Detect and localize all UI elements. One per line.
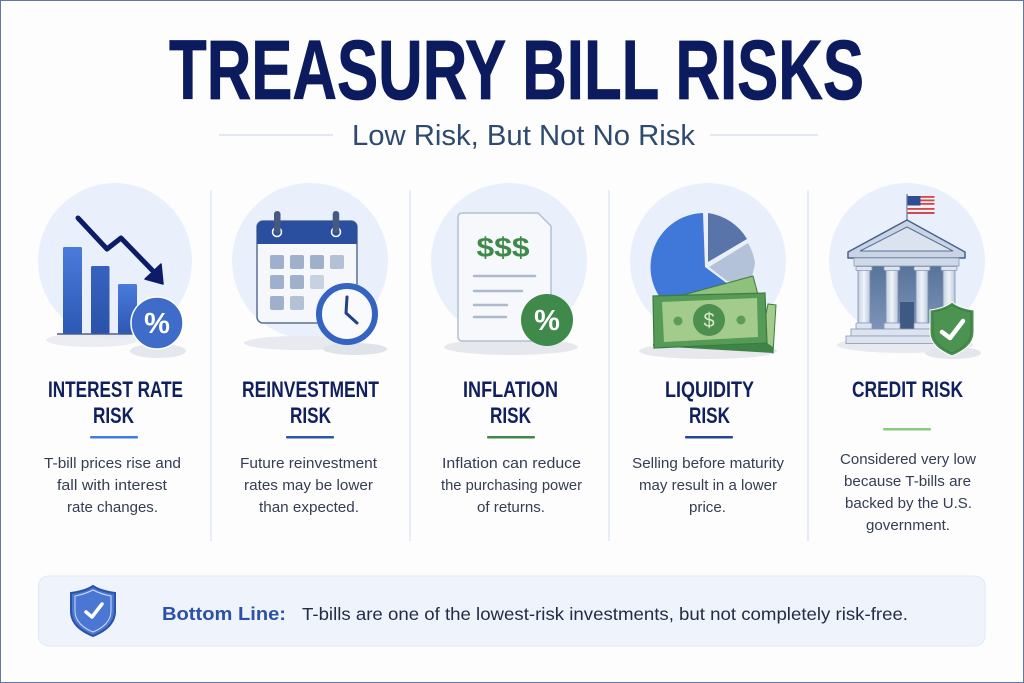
icon: document with dollars and percent badge: % — [534, 305, 560, 337]
panel: reinvestment risk — [232, 183, 388, 516]
icon: calendar with clock — [232, 183, 388, 355]
description — [840, 452, 977, 534]
heading — [665, 377, 754, 428]
heading: RISK — [93, 403, 134, 428]
icon: falling bar chart with percent badge — [38, 183, 192, 358]
icon: document with dollars and percent badge: $$$ — [476, 232, 530, 263]
heading: RISK — [290, 403, 331, 428]
description: Selling before maturity — [632, 456, 785, 472]
icon: pie chart with banknotes — [630, 183, 786, 359]
icon: falling bar chart with percent badge: % — [144, 308, 170, 340]
accent underline — [286, 436, 334, 438]
panel: liquidity risk — [630, 183, 786, 516]
icon: document with dollars and percent badge — [431, 183, 587, 355]
panel: interest rate risk — [38, 183, 192, 516]
accent underline — [487, 436, 535, 438]
heading — [48, 377, 183, 428]
description: may result in a lower — [639, 478, 777, 494]
description — [632, 456, 785, 516]
icon: government building with flag and shield — [829, 183, 985, 359]
heading: REINVESTMENT — [242, 377, 379, 402]
description: rate changes. — [67, 500, 158, 516]
icon: shield with check — [71, 586, 115, 636]
description: Future reinvestment — [240, 456, 377, 472]
description: fall with interest — [57, 478, 167, 494]
heading: INFLATION — [463, 377, 558, 402]
description: rates may be lower — [244, 478, 373, 494]
panel: credit risk — [829, 183, 985, 534]
description: Inflation can reduce — [442, 456, 581, 472]
label: bottom line: Bottom Line: — [162, 604, 286, 624]
panel: bottom line callout — [38, 576, 985, 646]
heading: RISK — [490, 403, 531, 428]
description: price. — [689, 500, 726, 516]
description: because T-bills are — [844, 474, 971, 490]
heading — [463, 377, 558, 428]
heading: LIQUIDITY — [665, 377, 754, 402]
description: backed by the U.S. — [845, 496, 972, 512]
description — [240, 456, 377, 516]
description: T-bill prices rise and — [44, 456, 181, 472]
description — [441, 456, 582, 516]
description: of returns. — [477, 500, 545, 516]
summary text: T-bills are one of the lowest-risk investments, but not completely risk-free. — [302, 604, 908, 624]
accent underline — [883, 428, 931, 430]
description: Considered very low — [840, 452, 977, 468]
description: than expected. — [259, 500, 359, 516]
heading: INTEREST RATE — [48, 377, 183, 402]
description — [44, 456, 181, 516]
heading — [242, 377, 379, 428]
accent underline — [90, 436, 138, 438]
icon: pie chart with banknotes: $ — [703, 310, 715, 332]
heading: RISK — [689, 403, 730, 428]
description: the purchasing power — [441, 478, 582, 494]
panel: inflation risk — [431, 183, 587, 516]
heading: CREDIT RISK — [852, 377, 963, 402]
subtitle: Low Risk, But Not No Risk — [352, 120, 696, 152]
accent underline — [685, 436, 733, 438]
description: government. — [866, 518, 950, 534]
